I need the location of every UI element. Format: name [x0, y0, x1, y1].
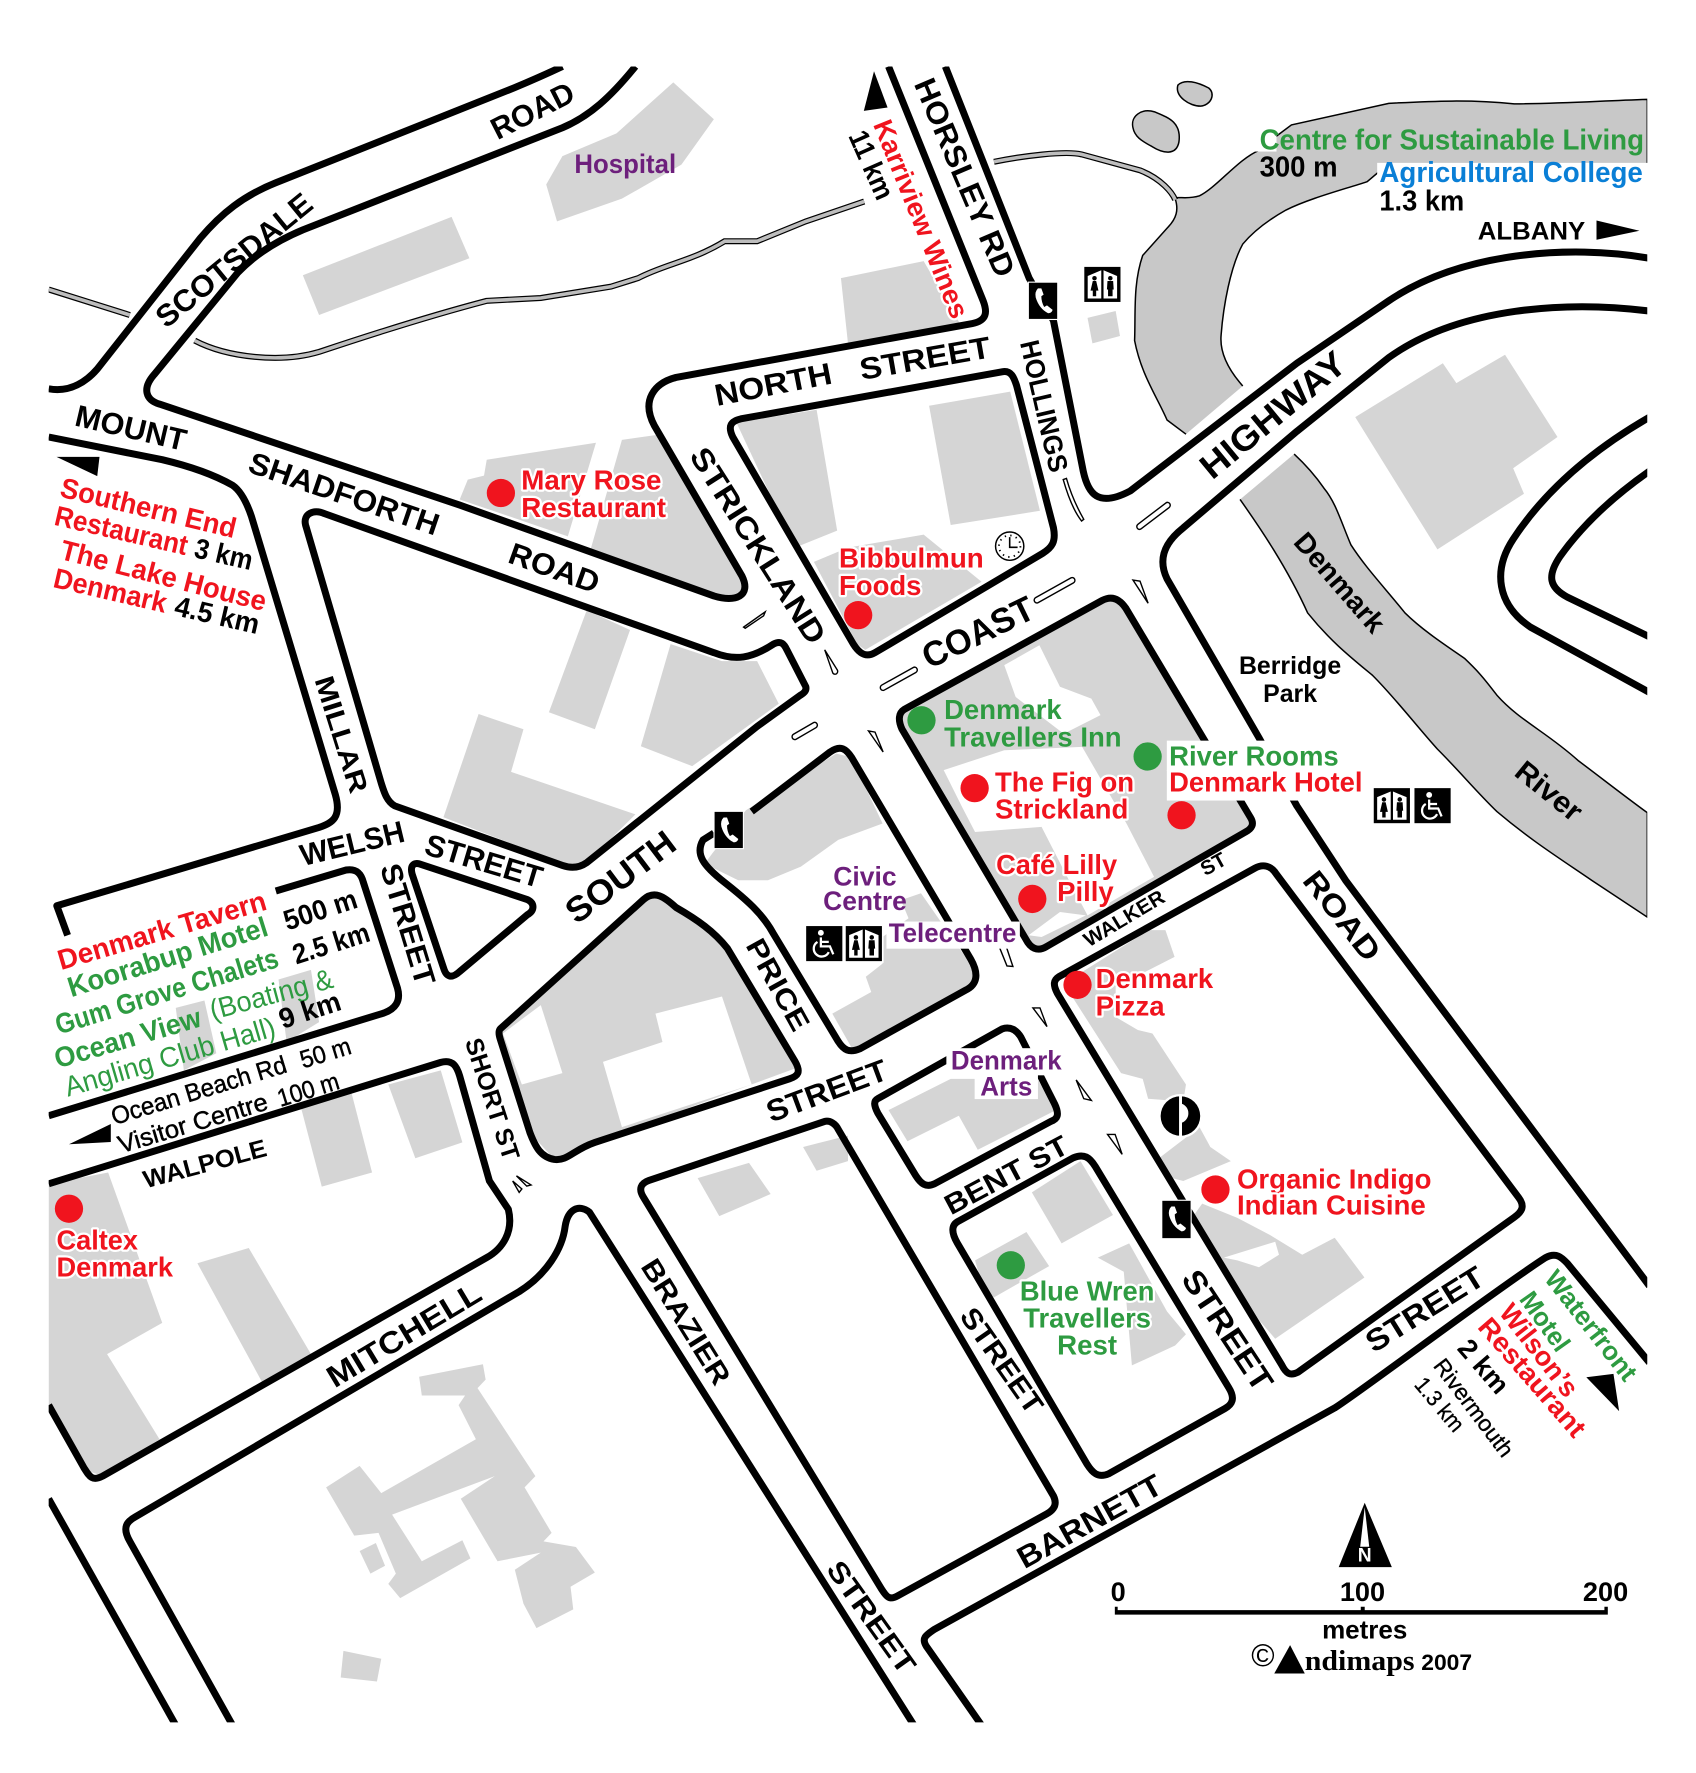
venue labels: Arts: [980, 1071, 1032, 1102]
traffic medians: [513, 478, 1171, 1192]
green dots: accommodation: [907, 706, 1162, 1279]
road name labels: ROAD: [504, 537, 604, 600]
label: Wilson's Restaurant: Wilson’s: [1493, 1297, 1585, 1403]
label: metres: metres: [1322, 1614, 1407, 1644]
road: east block: [1054, 866, 1522, 1374]
label: Restaurant 3 km: 3 km: [192, 532, 256, 576]
directions: west along Welsh Street: (Boating &: [206, 962, 337, 1026]
label: Denmark 4.5 km: [51, 562, 263, 640]
label: Denmark Pizza: Denmark: [1096, 963, 1214, 994]
red dots: restaurants: [55, 479, 1230, 1223]
road: far south-west edge: [49, 1499, 176, 1725]
white gaps behind labels: [886, 127, 1649, 1099]
venue labels: Strickland: [995, 794, 1128, 825]
directions: south-east: Motel: [1514, 1285, 1577, 1357]
label: Mitchell: MITCHELL: [321, 1276, 488, 1395]
label: Ocean View Boating and Angling Club Hall 9 km: Ocean View: [50, 1001, 206, 1074]
label: Mary Rose Restaurant: Mary Rose: [521, 465, 661, 496]
label: Visitor Centre 100 m: Visitor Centre: [115, 1088, 271, 1159]
directions: Karriview Wines: [843, 115, 975, 323]
label: Walpole: WALPOLE: [140, 1134, 270, 1194]
block: Denmark Arts buildings: [889, 1079, 1056, 1150]
road name labels: STREET: [821, 1554, 923, 1680]
label: Denmark Arts: Denmark: [951, 1045, 1063, 1076]
icon: post office: [1158, 1094, 1202, 1138]
river and park names: Park: [1263, 680, 1317, 708]
icon: phone, Strickland Street: [1161, 1200, 1192, 1239]
icon: toilets, Hollings: [1083, 265, 1122, 304]
directions: south-east: [1410, 1264, 1644, 1462]
scale bar: 200: [1583, 1576, 1628, 1607]
label: The Lake House: The Lake House: [57, 533, 270, 617]
label: Koorabup Motel 2.5 km: Koorabup Motel: [63, 910, 272, 1003]
label: Horsley Rd: HORSLEY RD: [907, 73, 1021, 282]
road name labels: STREET: [954, 1301, 1050, 1420]
icon: clock: [996, 532, 1024, 560]
road name labels: STREET: [1359, 1260, 1491, 1359]
label: Restaurant 3 km: Restaurant: [52, 499, 192, 561]
label: Scotsdale: SCOTSDALE: [149, 186, 319, 334]
label: Telecentre: Telecentre: [889, 917, 1016, 948]
icon: wheelchair access, Denmark Hotel: [1413, 786, 1452, 825]
block: Price Street buildings: [500, 894, 798, 1159]
road: highway south and Road east edge: [1163, 307, 1649, 1286]
label: Organic Indigo Indian Cuisine: Organic Indigo: [1237, 1163, 1431, 1194]
road: Civic Centre block: [700, 748, 976, 1051]
label: South: SOUTH: [558, 823, 683, 931]
label: Strickland Street lower: STREET: [1175, 1263, 1281, 1398]
scale bar: [1111, 1576, 1628, 1644]
block: Civic Centre buildings: [705, 754, 883, 880]
copyright: Andimaps 2007: [1251, 1638, 1472, 1677]
venue labels: Pizza: [1096, 990, 1165, 1021]
directions: west along Welsh Street: 50 m: [297, 1032, 355, 1074]
river: lower reach: [1240, 454, 1647, 917]
venue labels: Centre: [823, 885, 907, 916]
label: Short St: SHORT ST: [459, 1035, 525, 1164]
label: 300 m: 300 m: [1260, 150, 1338, 182]
label: Berridge Park: Berridge: [1239, 652, 1341, 680]
road: Bibbulmun block: [730, 372, 1054, 655]
road name labels: STREET: [762, 1053, 893, 1129]
label: Barnett: BARNETT: [1011, 1468, 1169, 1576]
label: Restaurant 3 km: [52, 499, 256, 576]
label: Denmark River: Denmark: [1288, 526, 1392, 639]
venue dots: [55, 479, 1230, 1279]
label: Bibbulmun Foods: Bibbulmun: [839, 543, 984, 574]
road name labels: ROAD: [485, 76, 580, 146]
block: Denmark Travellers Inn buildings: [899, 598, 1252, 949]
road: Walpole and Mitchell block: [49, 1062, 510, 1478]
road: triangle island: [411, 864, 533, 976]
arrow: west Mount Shadforth: [57, 457, 99, 476]
road name labels: STREET: [421, 828, 547, 895]
icon: phone, South Coast: [713, 811, 744, 849]
label: Ocean Beach Rd 50 m: Ocean Beach Rd: [108, 1051, 290, 1131]
river and park names: River: [1508, 754, 1589, 828]
road name labels: ST: [1197, 849, 1231, 881]
label: 2 km: 2 km: [1452, 1333, 1516, 1400]
label: Millar: MILLAR: [309, 672, 375, 797]
directions: west of Millar: [51, 471, 270, 640]
directions: south-east: 1.3 km: [1410, 1372, 1469, 1437]
label: Civic Centre: Civic: [833, 860, 897, 891]
label: Karriview Wines: Karriview Wines: [867, 115, 975, 323]
label: Denmark Hotel: Denmark Hotel: [1169, 767, 1362, 798]
river: upper reach and lake: [1135, 99, 1647, 434]
road: eastern curve outer: [1501, 417, 1649, 692]
label: Road east: ROAD: [1296, 864, 1387, 968]
river: [1133, 82, 1647, 917]
directions: west along Welsh Street: 9 km: [275, 985, 345, 1035]
label: Strickland: STRICKLAND: [683, 441, 833, 650]
label: Hospital: Hospital: [574, 148, 676, 179]
road name labels: STREET: [373, 860, 441, 989]
venue labels: Denmark: [57, 1252, 174, 1283]
road: Blue Wren block: [953, 1156, 1232, 1475]
label: 1.3 km: 1.3 km: [1379, 184, 1464, 216]
label: Denmark Travellers Inn: Denmark: [944, 694, 1062, 725]
icon: toilets, Denmark Hotel: [1372, 786, 1412, 825]
road: Welsh south edge: [49, 870, 399, 1116]
label: Bent St: BENT ST: [939, 1129, 1074, 1221]
label: Denmark 4.5 km: 4.5 km: [172, 590, 263, 640]
road: Brazier to Barnett block: [641, 1121, 1055, 1598]
label: Welsh Street: WELSH: [297, 815, 408, 873]
directions: west along Welsh Street: [50, 882, 374, 1159]
icon: toilets, Civic Centre: [844, 924, 884, 963]
directions: south-east: Restaurant: [1472, 1311, 1593, 1443]
label: Denmark Tavern 500 m: Denmark Tavern: [54, 884, 270, 976]
label: Walker St: WALKER: [1080, 886, 1169, 952]
label: Mount Shadforth Road: MOUNT: [72, 399, 190, 458]
label: Southern End: Southern End: [57, 471, 240, 544]
icon: wheelchair access, Civic Centre: [804, 924, 844, 963]
ponds: [1133, 111, 1179, 152]
label: North Street: NORTH: [712, 357, 835, 413]
creek: [49, 153, 1175, 358]
venue labels: Restaurant: [521, 492, 666, 523]
arrow: south-east: [1586, 1374, 1619, 1411]
road: Scotsdale north edge: [49, 66, 562, 390]
label: Price Street: PRICE: [740, 933, 817, 1036]
arrow: Albany: [1597, 221, 1639, 240]
river and park names: [1239, 526, 1589, 828]
road: Denmark Arts block: [875, 1028, 1057, 1185]
venue labels: Foods: [839, 570, 921, 601]
venue labels: Travellers: [1023, 1302, 1151, 1333]
road: Mitchell south and Brazier west: [126, 1208, 914, 1725]
label: Albany: ALBANY: [1478, 218, 1586, 246]
venue labels: Pilly: [1057, 876, 1114, 907]
arrow: Walpole: [69, 1124, 111, 1144]
icon: phone, Hollings: [1028, 282, 1058, 320]
label: Cafe Lilly Pilly: Café Lilly: [996, 849, 1118, 880]
arrows: [57, 71, 1639, 1411]
copyright: Andimaps 2007: ©: [1251, 1638, 1275, 1674]
road: Price block: [499, 895, 798, 1160]
north arrow: N: [1358, 1546, 1372, 1567]
label: Highway: HIGHWAY: [1192, 344, 1354, 487]
scale bar: 0: [1111, 1576, 1126, 1607]
building: hospital: [546, 82, 714, 221]
label: Centre for Sustainable Living: Centre for Sustainable Living: [1260, 123, 1644, 155]
road: Horsley, Hollings and highway north edge: [945, 66, 1649, 498]
venue labels: [57, 123, 1644, 1361]
road: Mount Shadforth, Millar and Welsh edge: [49, 437, 337, 935]
block: eastern shops: [1064, 930, 1186, 1102]
road: block between Shadforth and South Coast: [305, 512, 806, 867]
directions: west along Welsh Street: 2.5 km: [288, 916, 374, 970]
label: Agricultural College: Agricultural College: [1379, 156, 1643, 188]
venue labels: Rest: [1057, 1330, 1117, 1361]
road: Travellers Inn block: [899, 598, 1252, 949]
directions: west along Welsh Street: 500 m: [279, 882, 361, 936]
north arrow: [1339, 1503, 1392, 1567]
venue labels: Travellers Inn: [944, 721, 1122, 752]
road: Scotsdale, Shadforth, Strickland, North and Horsley edge: [147, 66, 986, 598]
label: Coast: COAST: [916, 589, 1041, 677]
road name labels: STREET: [857, 331, 993, 387]
building complex: school: [326, 1364, 595, 1628]
road: eastern curve inner: [1552, 471, 1649, 637]
arrow: north Karriview: [864, 71, 888, 111]
label: Waterfront Motel: Waterfront: [1539, 1264, 1644, 1387]
label: Hollings: HOLLINGS: [1014, 337, 1074, 475]
road name labels: SHADFORTH: [244, 446, 444, 542]
copyright: Andimaps 2007: 2007: [1421, 1650, 1472, 1675]
label: Brazier Street: BRAZIER: [635, 1253, 738, 1390]
label: Blue Wren Travellers Rest: Blue Wren: [1020, 1275, 1154, 1306]
block: Blue Wren buildings: [975, 1232, 1049, 1297]
label: 11 km: 11 km: [843, 125, 901, 204]
label: River Rooms: River Rooms: [1169, 741, 1339, 772]
label: Denmark 4.5 km: Denmark: [51, 562, 170, 619]
scale bar: 100: [1340, 1576, 1385, 1607]
label: The Fig on Strickland: The Fig on: [995, 767, 1134, 798]
venue labels: Indian Cuisine: [1237, 1189, 1426, 1220]
copyright: Andimaps 2007: ndimaps: [1305, 1646, 1414, 1677]
block: Caltex buildings: [49, 1172, 162, 1476]
road: Barnett south edge: [924, 1255, 1649, 1725]
label: Gum Grove Chalets: Gum Grove Chalets: [51, 942, 282, 1040]
label: Rivermouth 1.3 km: Rivermouth: [1429, 1354, 1519, 1462]
directions: west along Welsh Street: 100 m: [274, 1067, 343, 1113]
directions: west along Welsh Street: Angling Club Hall): [61, 1011, 279, 1103]
label: Caltex Denmark: Caltex: [57, 1224, 139, 1255]
